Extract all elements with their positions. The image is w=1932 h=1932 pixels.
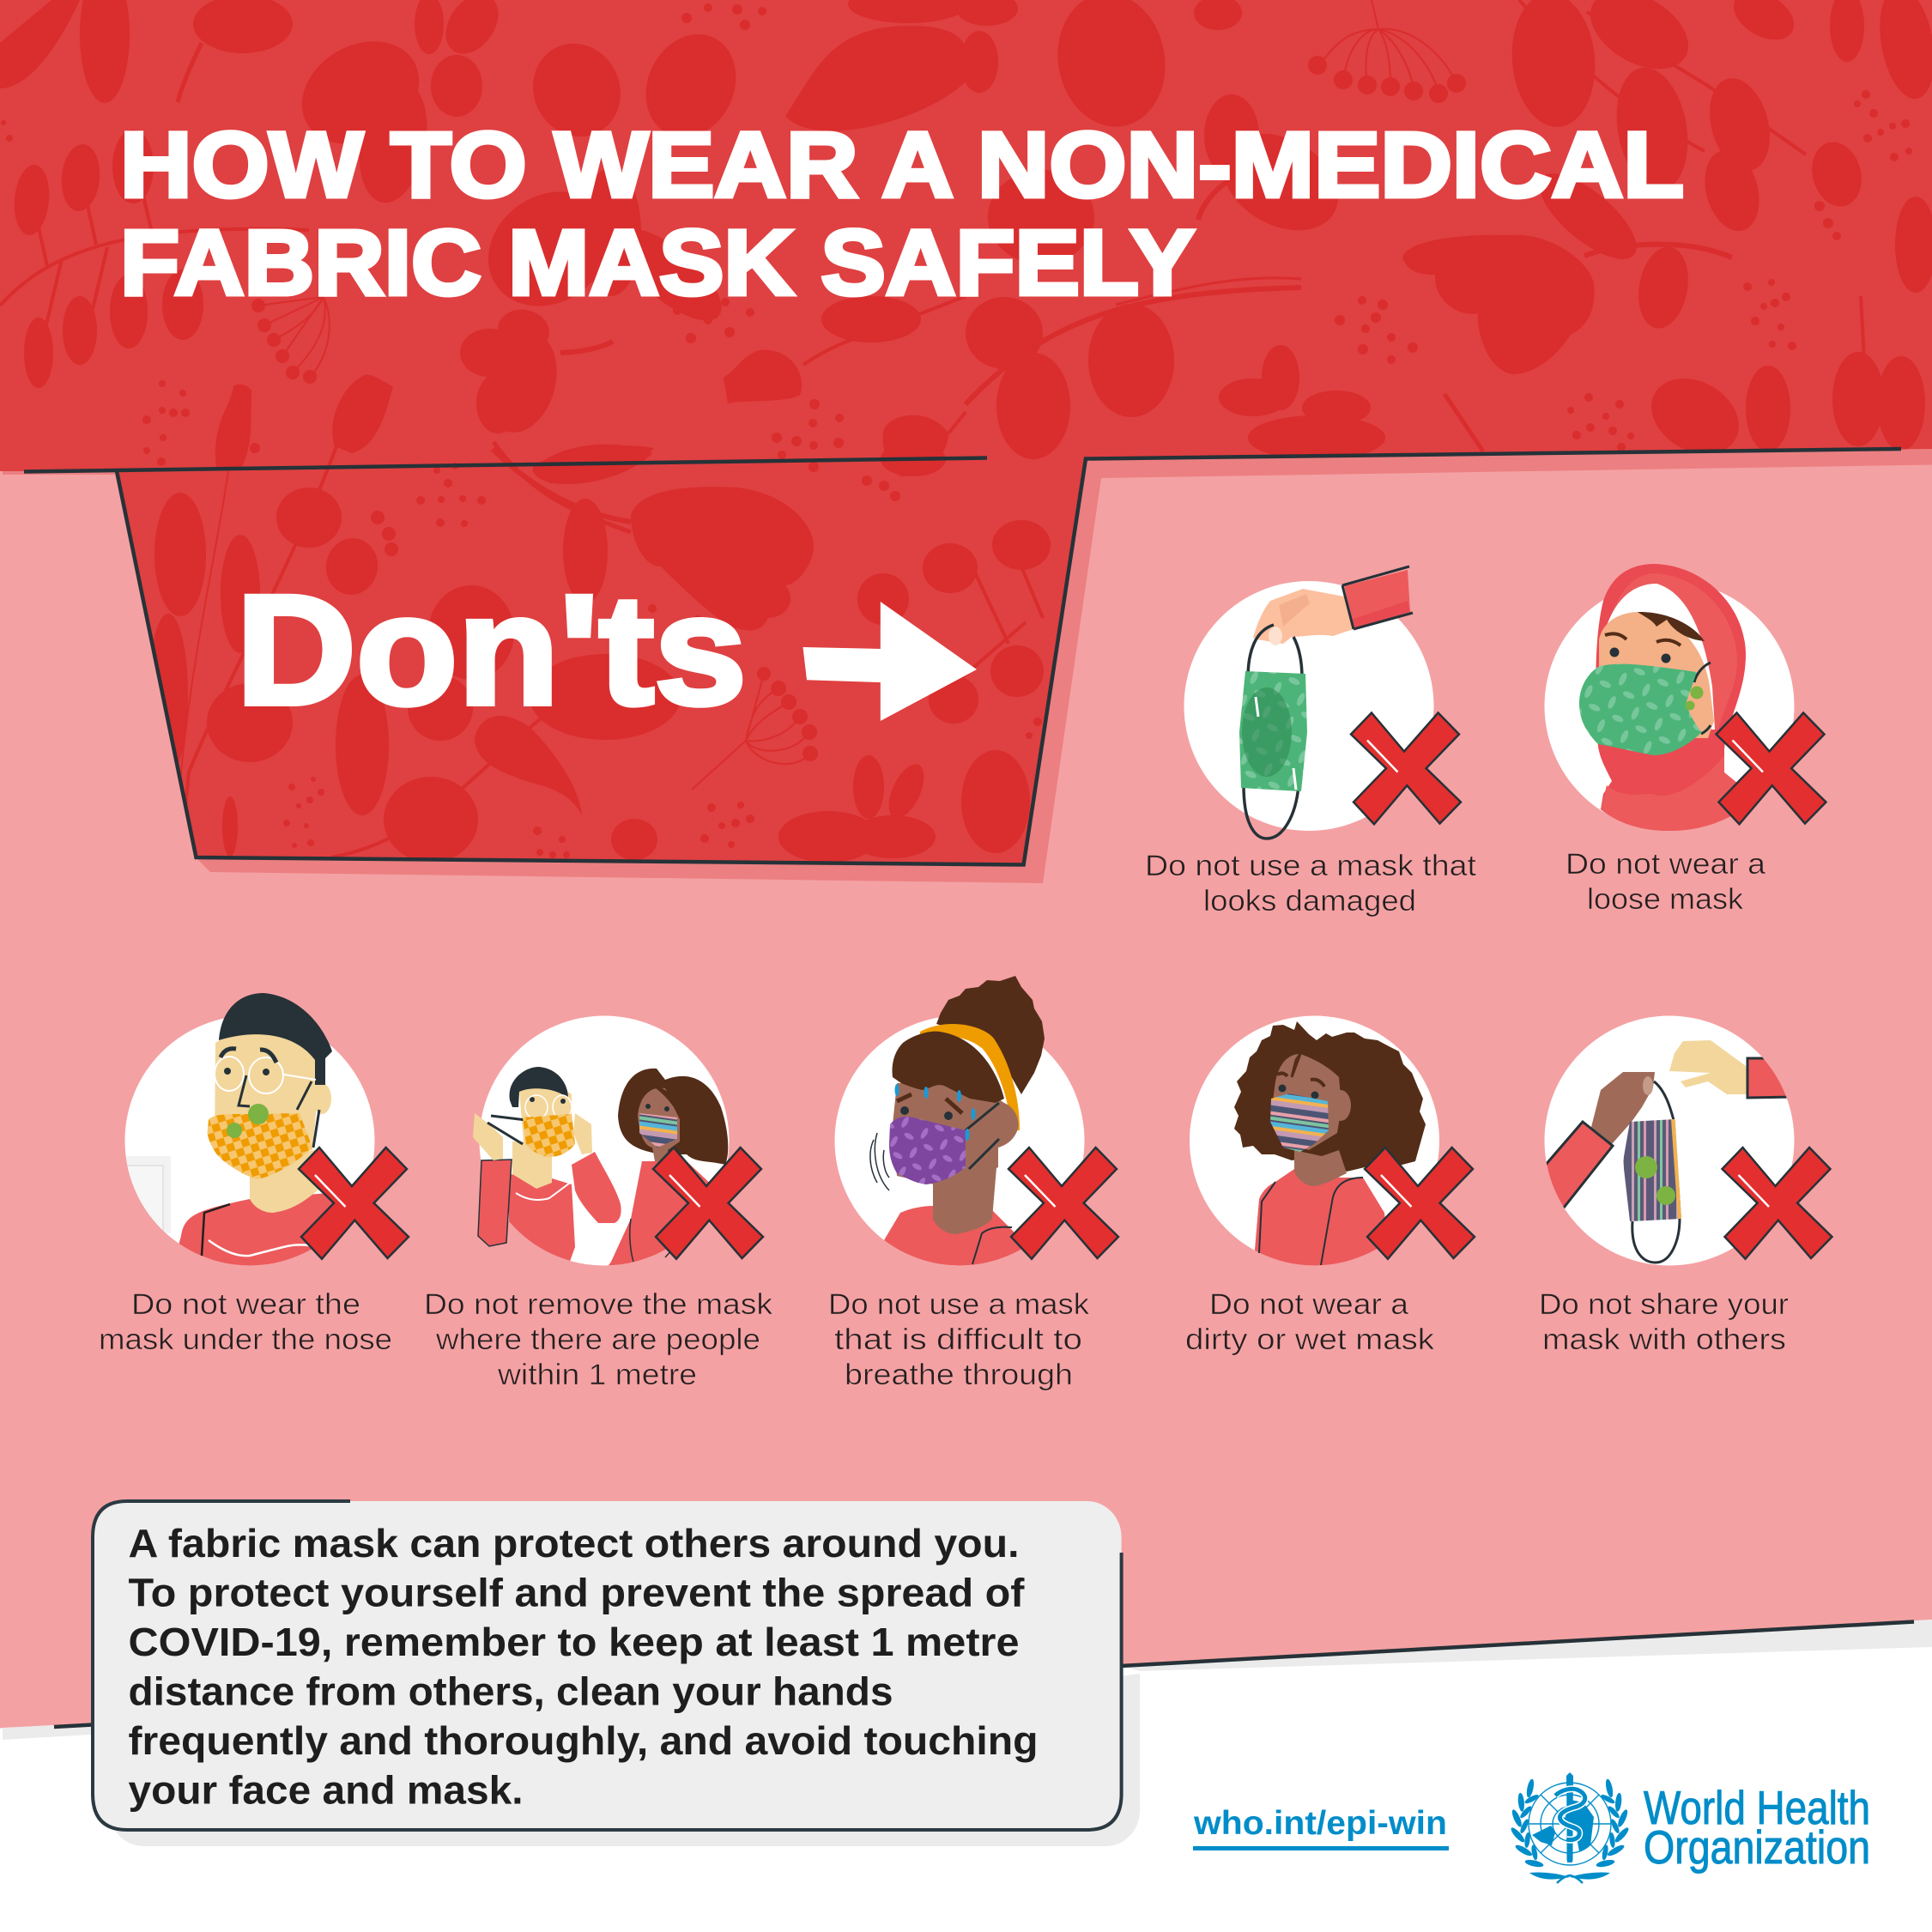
white circle <box>1545 1016 1794 1265</box>
white circle <box>1545 581 1794 831</box>
bottom edge line of pink area <box>54 1622 1914 1727</box>
callout text <box>129 1521 1039 1813</box>
caption <box>1566 848 1765 916</box>
panel: mask under nose <box>99 993 409 1356</box>
icon: patterned mask <box>1270 1093 1329 1152</box>
icon: man adjusting mask <box>473 1067 621 1266</box>
grey band under pink area <box>3 1723 91 1740</box>
callout text: COVID-19, remember to keep at least 1 metre <box>129 1620 1020 1664</box>
icon: second hand <box>1669 1040 1794 1098</box>
callout text: A fabric mask can protect others around you. <box>129 1521 1020 1566</box>
arrow <box>803 602 977 721</box>
callout text: your face and mask. <box>129 1768 524 1813</box>
caption: mask under the nose <box>99 1323 392 1356</box>
panel: loose mask <box>1545 564 1826 916</box>
white circle <box>1190 1016 1439 1265</box>
icon: purple mask <box>889 1117 966 1184</box>
panel: removing mask near people <box>424 1016 773 1391</box>
icon: woman with hair bun <box>880 976 1045 1270</box>
callout text: To protect yourself and prevent the spread of <box>129 1571 1025 1615</box>
caption: loose mask <box>1587 883 1744 916</box>
white circle <box>1184 581 1433 831</box>
panel: sharing mask <box>1536 1016 1832 1356</box>
icon: red cross <box>299 1148 409 1259</box>
icon: man with glasses <box>179 993 333 1265</box>
icon: hand passing mask <box>1536 1072 1680 1263</box>
heading: Don'ts: Don'ts <box>236 562 747 737</box>
caption: mask with others <box>1542 1323 1786 1356</box>
caption <box>1539 1288 1789 1356</box>
icon: woman with curly hair <box>605 1069 730 1270</box>
caption: Do not use a mask <box>828 1288 1090 1321</box>
icon: red cross <box>1365 1148 1475 1259</box>
icon: patterned mask with virus <box>1623 1119 1681 1221</box>
link: who.int/epi-win: who.int/epi-win <box>1193 1805 1447 1842</box>
icon: woman in red headscarf <box>1596 564 1746 831</box>
caption <box>424 1288 773 1391</box>
panel: damaged mask <box>1145 566 1477 918</box>
caption: that is difficult to <box>834 1323 1082 1356</box>
callout text: distance from others, clean your hands <box>129 1669 893 1713</box>
title <box>120 112 1684 314</box>
panel: difficult to breathe <box>828 976 1118 1391</box>
caption: Do not remove the mask <box>424 1288 773 1321</box>
callout text: frequently and thoroughly, and avoid touching <box>129 1718 1039 1763</box>
panel: red floral header and Don'ts tab <box>0 0 1932 867</box>
white circle <box>125 1016 374 1265</box>
caption <box>99 1288 392 1356</box>
caption: dirty or wet mask <box>1185 1323 1435 1356</box>
caption: Do not share your <box>1539 1288 1789 1321</box>
icon: loose green mask <box>1579 663 1711 755</box>
World Health Organization wordmark: World Health <box>1644 1781 1870 1834</box>
panel shadow <box>196 448 1932 883</box>
caption <box>1145 850 1477 918</box>
icon: damaged green mask <box>1239 671 1307 791</box>
caption: where there are people <box>435 1323 760 1356</box>
caption: breathe through <box>845 1359 1073 1391</box>
caption: within 1 metre <box>497 1359 697 1391</box>
panel: pink content area <box>0 442 1932 1729</box>
title: FABRIC MASK SAFELY <box>120 210 1195 314</box>
callout <box>93 1501 1122 1830</box>
icon: red cross <box>1008 1148 1118 1259</box>
window background <box>125 1156 171 1233</box>
caption: Do not wear a <box>1209 1288 1408 1321</box>
World Health Organization wordmark <box>1644 1781 1870 1874</box>
icon: hand holding mask <box>1244 566 1413 839</box>
callout outline <box>93 1501 1122 1830</box>
icon: red cross <box>1722 1148 1832 1259</box>
caption: Do not wear the <box>131 1288 360 1321</box>
icon: WHO emblem <box>1509 1772 1631 1883</box>
icon: woman with curly hair <box>1234 1021 1426 1270</box>
World Health Organization wordmark: Organization <box>1644 1820 1870 1874</box>
callout box shadow <box>110 1674 1140 1846</box>
panel outline strokes <box>24 449 1901 865</box>
title: HOW TO WEAR A NON-MEDICAL <box>120 112 1684 216</box>
icon: red cross <box>653 1148 763 1259</box>
header shadow strip <box>3 471 120 475</box>
caption: Do not wear a <box>1566 848 1765 881</box>
white circle <box>834 1016 1085 1265</box>
icon: orange mask <box>523 1114 575 1157</box>
caption <box>828 1288 1090 1391</box>
panel: dirty or wet mask <box>1185 1016 1475 1356</box>
callout background <box>93 1501 1122 1830</box>
white circle <box>479 1016 730 1265</box>
caption <box>1185 1288 1435 1356</box>
caption: looks damaged <box>1203 885 1416 918</box>
grey band under pink area right <box>1121 1620 1932 1671</box>
icon: sweat drops <box>894 1084 975 1141</box>
caption: Do not use a mask that <box>1145 850 1477 882</box>
icon: orange mask with virus <box>208 1104 312 1179</box>
icon: red cross <box>1717 712 1826 824</box>
icon: breath lines <box>870 1133 889 1190</box>
icon: red cross <box>1351 712 1461 824</box>
